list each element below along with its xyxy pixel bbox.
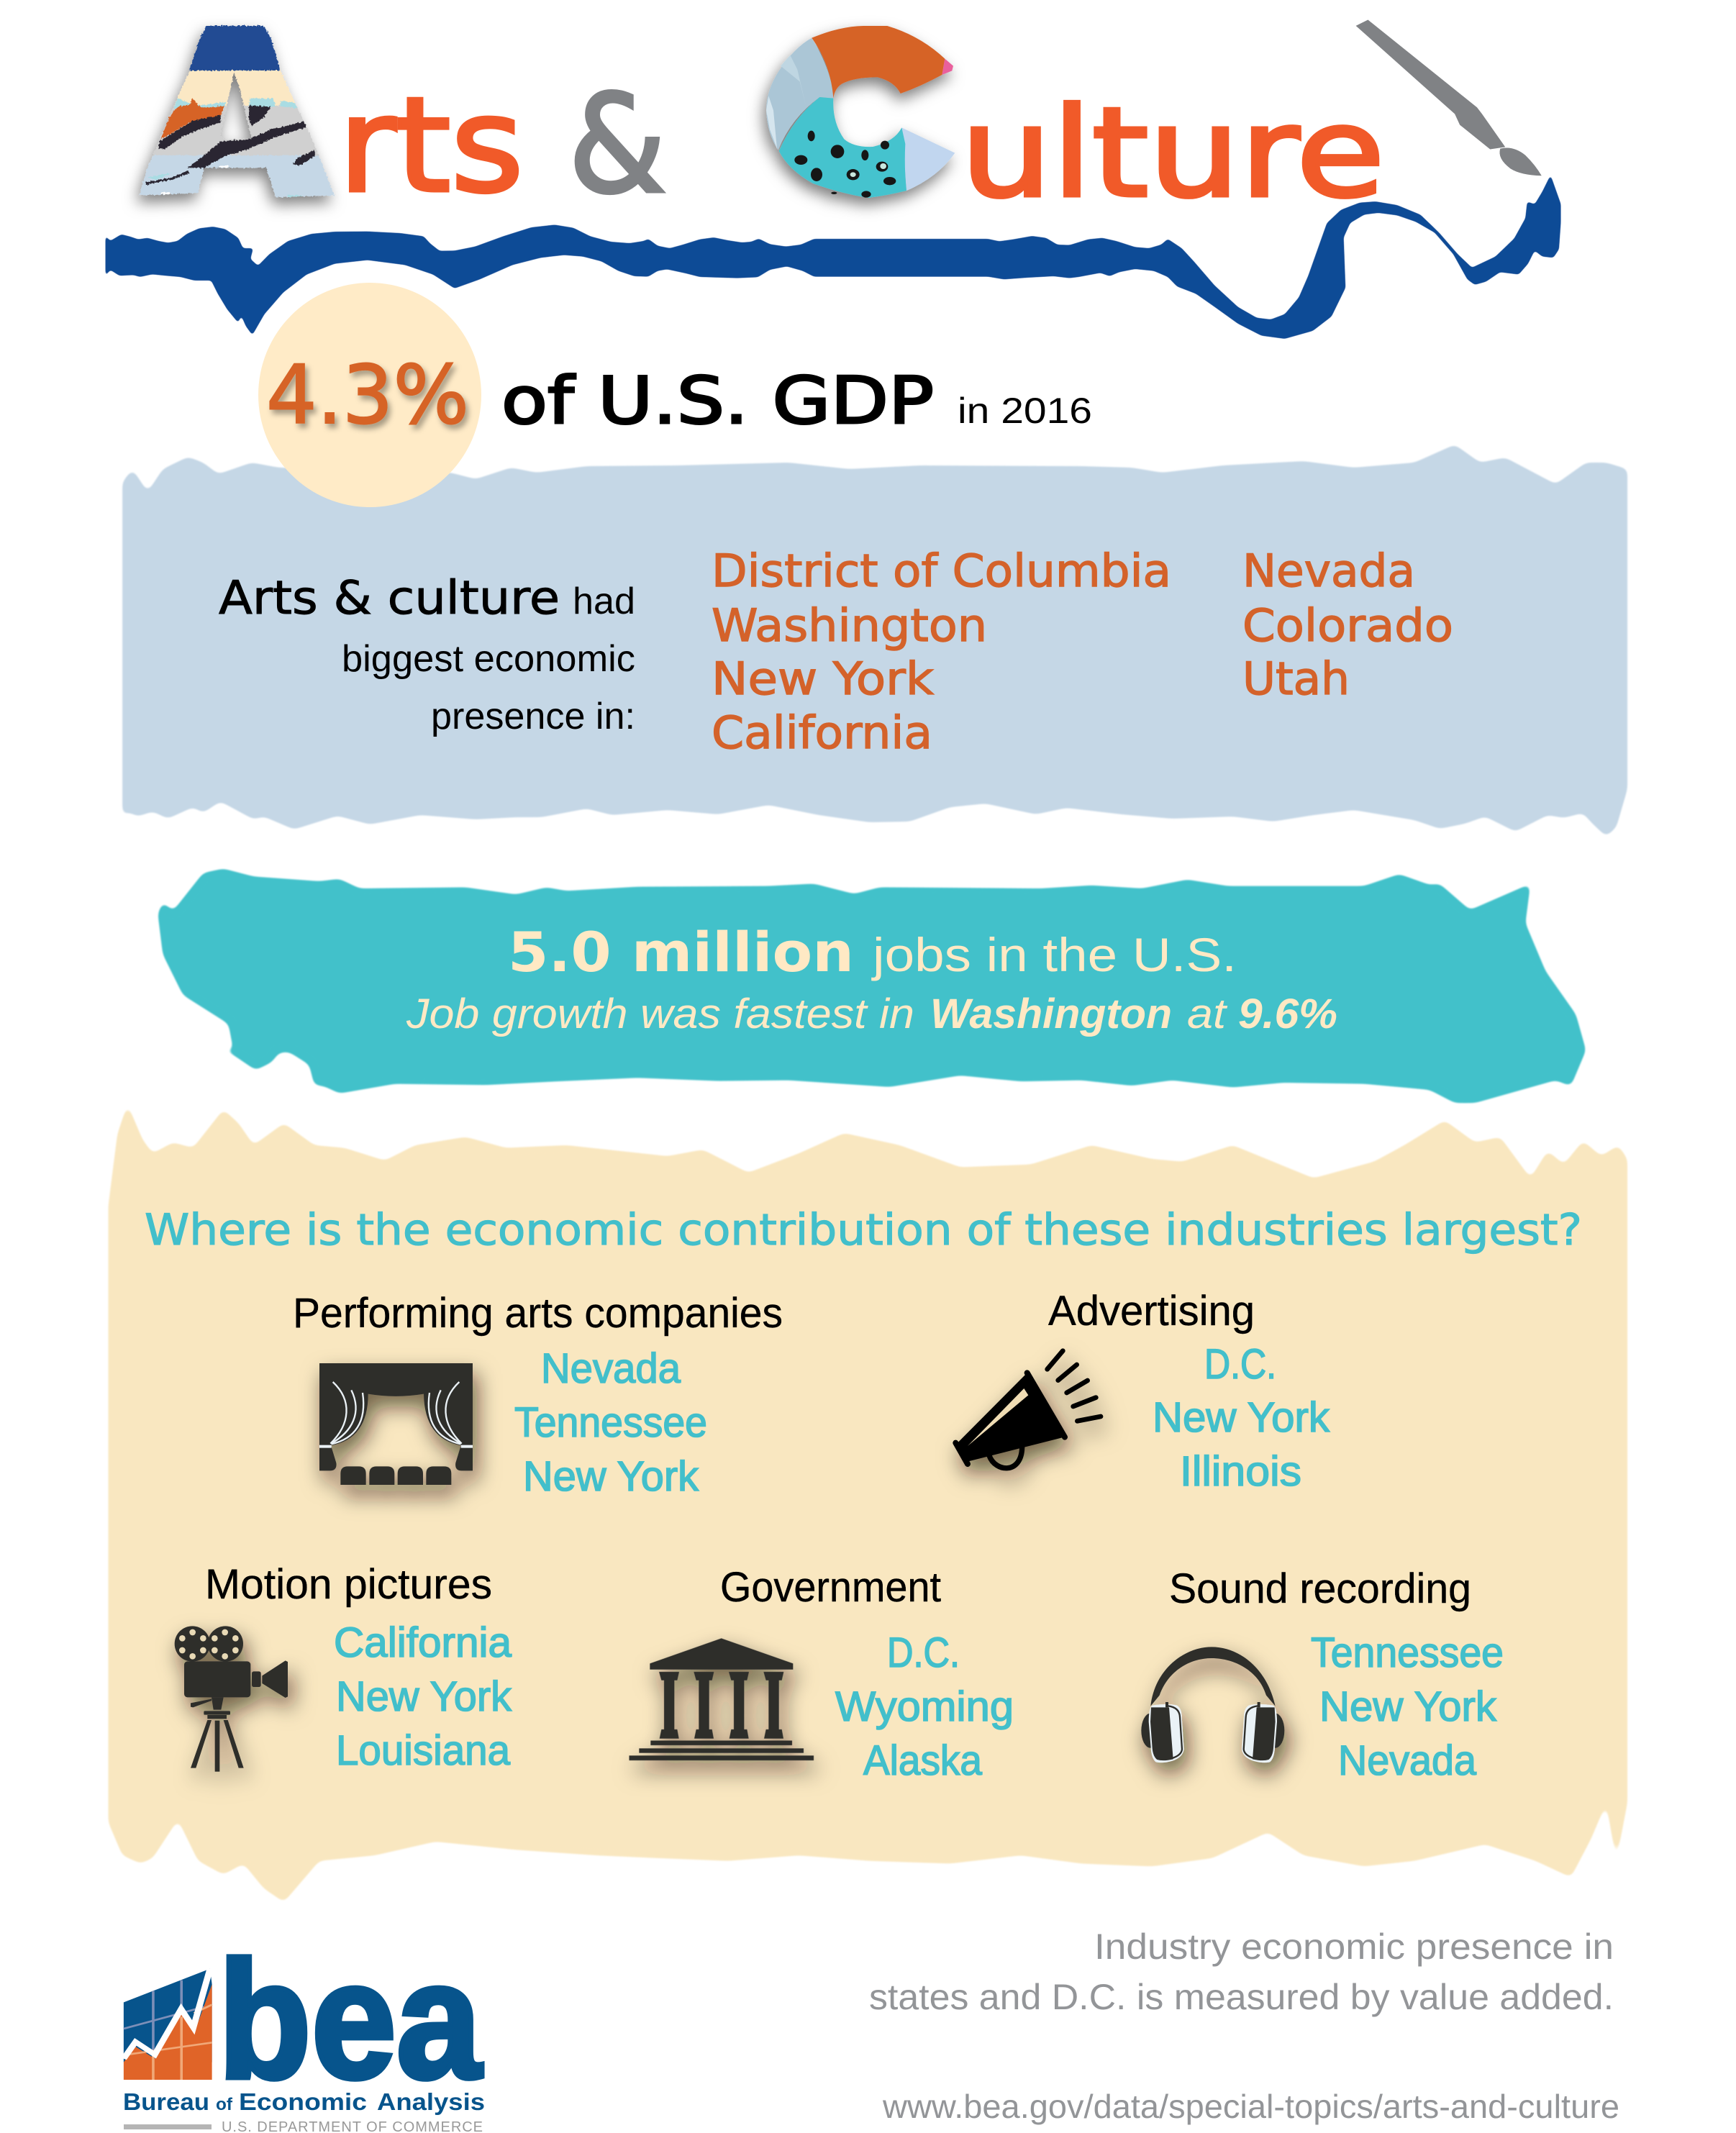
- logo name: Analysis: [377, 2088, 485, 2115]
- list: top states column two: Utah: [1242, 652, 1350, 705]
- icon: film camera: [175, 1626, 288, 1772]
- group: performing arts companies: Tennessee: [514, 1399, 707, 1446]
- subhead: job growth: Washington: [930, 991, 1172, 1037]
- list: top states column two: Colorado: [1242, 599, 1453, 652]
- logo name: [123, 2088, 485, 2115]
- panel: jobs: [158, 868, 1586, 1103]
- letter C of title, painted shapes: [766, 26, 955, 198]
- title: ampersand: &: [568, 66, 666, 224]
- group: sound recording: Nevada: [1338, 1737, 1477, 1784]
- heading: arts and culture had: had: [573, 581, 635, 622]
- list: top states column one: [712, 545, 1171, 759]
- heading: arts and culture had: [219, 572, 635, 737]
- icon: headphones: [1141, 1647, 1284, 1763]
- group: performing arts companies: [293, 1290, 783, 1500]
- group: advertising: Advertising: [1048, 1288, 1255, 1334]
- logo name: Economic: [239, 2088, 367, 2115]
- brush stroke ribbon: [106, 175, 1561, 339]
- group: performing arts companies: Performing arts companies: [293, 1290, 783, 1337]
- logo wordmark: bea: bea: [218, 1927, 483, 2114]
- group: government: Wyoming: [835, 1683, 1014, 1730]
- stat label: of U.S. GDP: of U.S. GDP: [501, 363, 934, 439]
- heading: arts and culture had: biggest economic: [342, 638, 635, 680]
- icon: megaphone: [955, 1351, 1101, 1468]
- group: government: Alaska: [863, 1737, 983, 1784]
- headline: 5.0 million jobs: [508, 920, 1237, 984]
- title: rts: rts: [338, 69, 524, 222]
- icon: theater curtain: [319, 1363, 473, 1485]
- heading: where is the contribution largest: Where is the economic contribution of these industries largest?: [145, 1205, 1582, 1255]
- group: government: Government: [720, 1564, 941, 1611]
- heading: arts and culture had: presence in:: [431, 696, 635, 737]
- group: advertising: [955, 1288, 1330, 1495]
- group: motion pictures: California: [334, 1619, 512, 1666]
- footnote: states and D.C. is measured by value added.: [869, 1977, 1614, 2017]
- group: performing arts companies: New York: [523, 1453, 699, 1500]
- panel: biggest economic presence: [122, 445, 1627, 837]
- logo name: Bureau: [123, 2088, 209, 2115]
- list: top states column one: Washington: [712, 599, 987, 652]
- group: sound recording: [1141, 1565, 1504, 1784]
- group: advertising: New York: [1153, 1394, 1330, 1441]
- list: top states column two: Nevada: [1242, 545, 1415, 597]
- heading: arts and culture had: Arts & culture: [219, 572, 560, 625]
- list: top states column two: [1242, 545, 1453, 705]
- logo mark: chart: [124, 1969, 212, 2080]
- group: sound recording: Sound recording: [1169, 1565, 1471, 1612]
- subhead: job growth: 9.6%: [1238, 991, 1337, 1037]
- group: motion pictures: Motion pictures: [205, 1561, 492, 1608]
- panel: industries: [109, 1104, 1627, 1902]
- icon: paint brush: [1356, 20, 1542, 176]
- logo: Bureau of Economic Analysis: [123, 1927, 485, 2133]
- callout circle: [258, 283, 481, 507]
- headline: 5.0 million jobs: jobs in the U.S.: [871, 928, 1237, 981]
- stat label: in 2016: in 2016: [958, 391, 1092, 431]
- group: performing arts companies: Nevada: [541, 1345, 681, 1392]
- subhead: job growth: [406, 991, 1337, 1037]
- group: motion pictures: [175, 1561, 512, 1774]
- icon: classical building: [629, 1638, 814, 1760]
- footnote: [869, 1927, 1614, 2017]
- list: top states column one: California: [712, 706, 932, 759]
- group: government: D.C.: [887, 1629, 960, 1676]
- list: top states column one: New York: [712, 652, 934, 705]
- group: sound recording: New York: [1319, 1683, 1497, 1730]
- group: government: [629, 1564, 1014, 1784]
- letter A of title, painted texture: [135, 22, 340, 201]
- source url: www.bea.gov/data/special-topics/arts-and-culture: [882, 2088, 1619, 2125]
- group: motion pictures: Louisiana: [336, 1727, 511, 1774]
- headline: 5.0 million jobs: 5.0 million: [508, 920, 854, 984]
- stat: 4.3 percent: 4.3%: [266, 349, 469, 442]
- subhead: job growth: at: [1187, 991, 1228, 1037]
- group: advertising: D.C.: [1204, 1341, 1276, 1388]
- footnote: Industry economic presence in: [1094, 1927, 1614, 1967]
- group: sound recording: Tennessee: [1311, 1629, 1504, 1676]
- title: ulture: ulture: [960, 81, 1385, 225]
- group: advertising: Illinois: [1180, 1448, 1301, 1495]
- group: motion pictures: New York: [336, 1673, 512, 1720]
- list: top states column one: District of Columbia: [712, 545, 1171, 597]
- subhead: job growth: Job growth was fastest in: [406, 991, 914, 1037]
- logo name: of: [216, 2095, 233, 2114]
